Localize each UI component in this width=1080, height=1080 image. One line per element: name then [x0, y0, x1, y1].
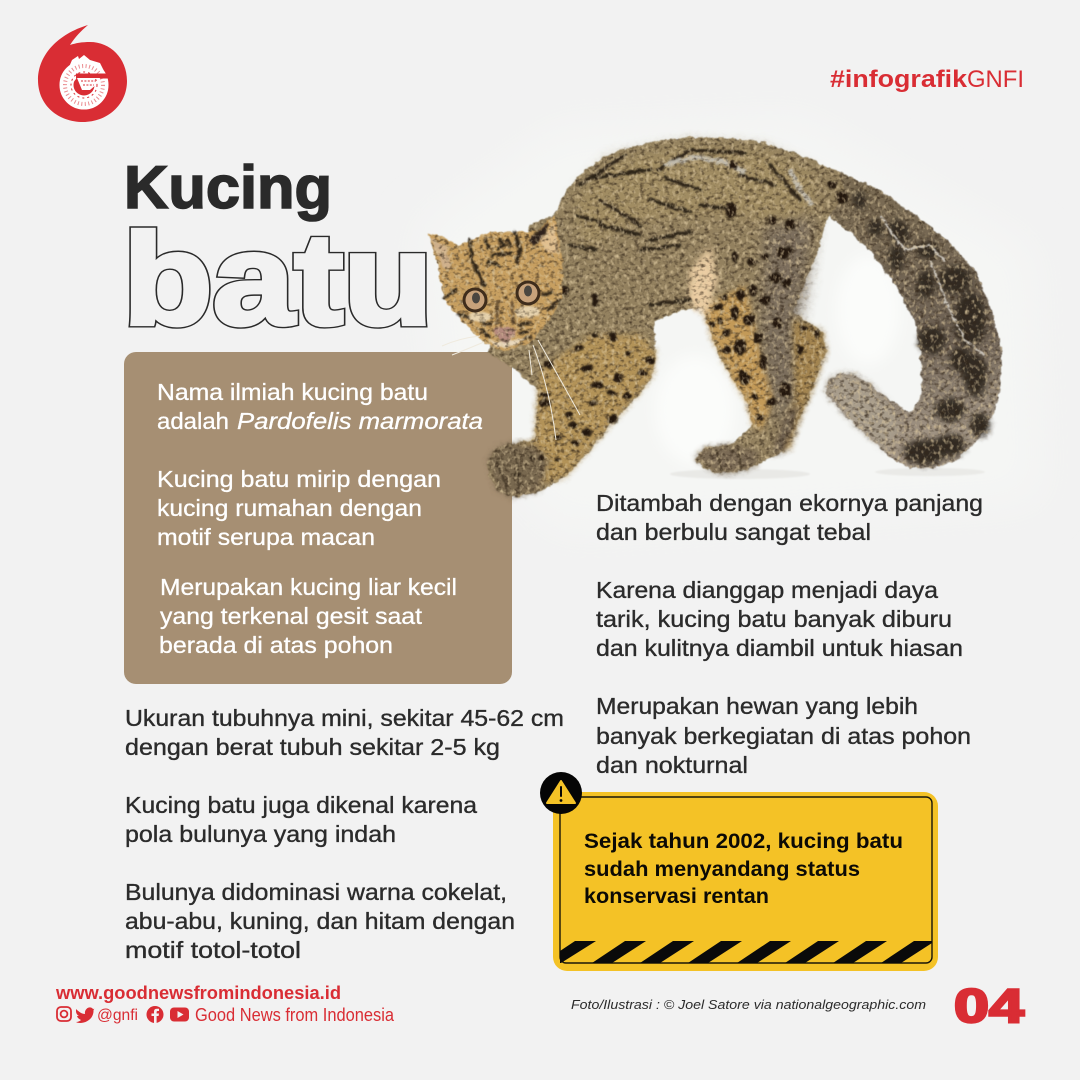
tail dark blotches	[853, 191, 990, 465]
text block: right column: Karena dianggap menjadi daya	[596, 577, 938, 603]
text block: right column: dan nokturnal	[596, 752, 748, 778]
body spots	[514, 161, 848, 477]
text: scientific name: Nama ilmiah kucing batu	[157, 379, 428, 405]
text block: left column: abu-abu, kuning, dan hitam dengan	[125, 908, 515, 934]
photo credit: Foto/Ilustrasi : © Joel Satore via nationalgeographic.com	[571, 997, 926, 1012]
head markings	[430, 222, 560, 348]
text block: left column: Bulunya didominasi warna cokelat,	[125, 879, 507, 905]
text block: right column: tarik, kucing batu banyak diburu	[596, 606, 952, 632]
text: scientific name: adalah	[157, 408, 229, 434]
text block: right column: Merupakan hewan yang lebih	[596, 693, 918, 719]
text block: right column: dan kulitnya diambil untuk hiasan	[596, 635, 963, 661]
cat front leg	[510, 335, 656, 490]
text: small wild cat: berada di atas pohon	[159, 632, 393, 658]
text: resemblance: Kucing batu mirip dengan	[157, 466, 441, 492]
text: resemblance	[157, 466, 441, 550]
cat back tone	[575, 145, 815, 250]
text: small wild cat: yang terkenal gesit saat	[160, 603, 423, 629]
text block: right column: banyak berkegiatan di atas pohon	[596, 723, 971, 749]
cat head	[428, 215, 563, 352]
tail tip	[826, 373, 900, 450]
cat photo illustration	[428, 137, 1002, 497]
text: resemblance: motif serupa macan	[157, 524, 375, 550]
tail pale lines	[880, 215, 985, 355]
icon: warning	[540, 772, 582, 814]
title outline word: batu	[123, 206, 433, 352]
whiskers	[442, 336, 580, 440]
page name: Good News from Indonesia	[195, 1005, 395, 1025]
cat chest patch	[688, 246, 718, 315]
text block: left column: dengan berat tubuh sekitar 2-5 kg	[125, 734, 500, 760]
text block: right column: Ditambah dengan ekornya panjang	[596, 490, 983, 516]
title: Kucing	[124, 154, 332, 221]
text block: left column	[125, 705, 564, 963]
cat hindquarter tone	[760, 215, 815, 430]
icon: instagram	[57, 1007, 71, 1021]
text: small wild cat: Merupakan kucing liar kecil	[160, 574, 457, 600]
icon: twitter	[76, 1007, 94, 1023]
footer: website: www.goodnewsfromindonesia.id	[55, 982, 341, 1003]
callout text: konservasi rentan	[584, 884, 769, 908]
photo backdrop	[420, 120, 1040, 530]
text: scientific name: Pardofelis marmorata	[237, 408, 483, 434]
text: scientific name	[157, 379, 483, 434]
text block: right column: dan berbulu sangat tebal	[596, 519, 871, 545]
callout: conservation status	[540, 772, 938, 971]
text block: left column: pola bulunya yang indah	[125, 821, 396, 847]
text block: left column: Kucing batu juga dikenal karena	[125, 792, 477, 818]
title	[123, 154, 433, 352]
cat body	[488, 137, 845, 497]
cat eyes	[462, 280, 540, 312]
page number: 04	[954, 979, 1024, 1032]
callout text: Sejak tahun 2002, kucing batu	[584, 829, 903, 853]
icon: youtube	[170, 1008, 189, 1022]
text: resemblance: kucing rumahan dengan	[157, 495, 422, 521]
cat tail	[815, 165, 1002, 468]
hashtag: #infografik	[830, 66, 968, 93]
back stripes	[570, 150, 812, 305]
callout text	[584, 829, 903, 908]
text block: left column: Ukuran tubuhnya mini, sekitar 45-62 cm	[125, 705, 564, 731]
hashtag	[830, 66, 1024, 93]
hazard stripes	[560, 941, 932, 963]
text block: left column: motif totol-totol	[125, 937, 301, 963]
text: small wild cat	[159, 574, 457, 658]
handle: @gnfi	[97, 1007, 138, 1024]
cat paws	[488, 443, 550, 497]
cat rear leg	[775, 318, 826, 450]
hashtag: GNFI	[967, 66, 1024, 93]
icon: facebook	[146, 1006, 164, 1023]
callout text: sudah menyandang status	[584, 857, 860, 881]
cat hind thigh	[703, 285, 772, 430]
panel: brown facts	[124, 352, 512, 684]
text block: right column	[596, 490, 983, 778]
logo: GNFI	[38, 25, 127, 122]
footer: social row	[57, 1005, 395, 1025]
title outline word: batu	[123, 206, 433, 352]
